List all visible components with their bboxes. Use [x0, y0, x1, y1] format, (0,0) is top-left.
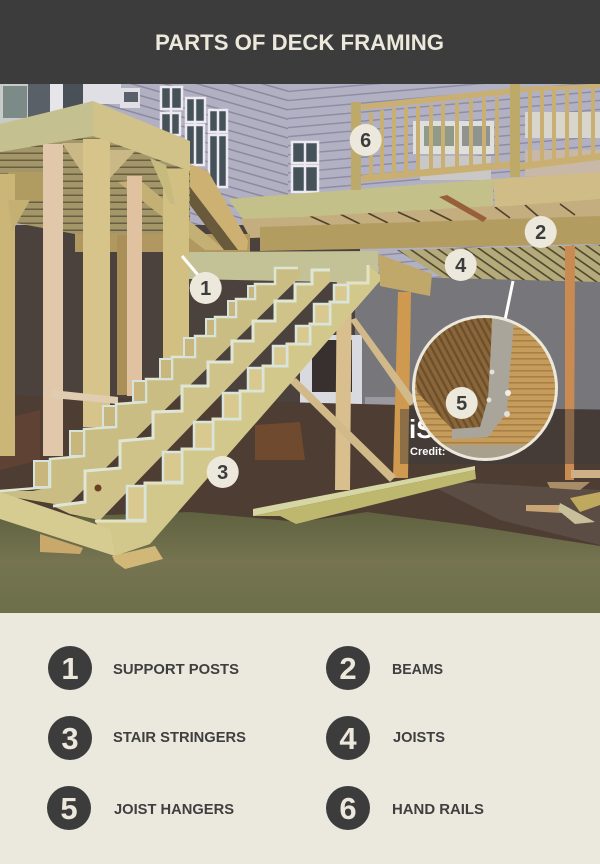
legend item 6	[326, 786, 484, 830]
lumber scraps	[526, 470, 600, 524]
upper rim beam	[228, 172, 600, 222]
badge 2	[525, 216, 557, 248]
watermark band	[400, 409, 600, 464]
house windows left	[161, 87, 318, 192]
title: PARTS OF DECK FRAMING	[155, 30, 444, 55]
stringer: back	[0, 268, 300, 506]
badge 6: 6	[360, 130, 371, 152]
watermark band: iStock	[409, 414, 488, 444]
legend item 3	[48, 716, 246, 760]
legend item 6: HAND RAILS	[392, 801, 484, 818]
badge 1: 1	[200, 278, 211, 300]
lying beam	[253, 466, 476, 524]
badge 3: 3	[217, 462, 228, 484]
cross board	[63, 391, 118, 404]
legend item 2: BEAMS	[392, 661, 443, 678]
stringer: middle	[53, 270, 330, 520]
legend item 6: 6	[339, 791, 357, 826]
legend item 5: JOIST HANGERS	[114, 801, 234, 818]
joists under upper deck	[240, 199, 600, 238]
basement walls	[10, 225, 600, 418]
beam: main girder	[260, 216, 600, 251]
zoom circle: joist hanger	[410, 310, 560, 461]
pointer lines	[182, 256, 513, 320]
watermark band: Credit:	[410, 446, 445, 458]
legend item 1	[48, 646, 239, 690]
dirt ground	[0, 395, 600, 560]
legend item 3: STAIR STRINGERS	[113, 729, 246, 746]
legend item 4: 4	[339, 721, 357, 756]
badge 3	[207, 456, 239, 488]
badge 5: 5	[456, 393, 467, 415]
tower underside and rafters	[0, 136, 250, 252]
badge 2: 2	[535, 222, 546, 244]
badge 5	[446, 387, 478, 419]
badge 6	[350, 124, 382, 156]
grass	[0, 512, 600, 613]
support blocks	[40, 534, 163, 569]
legend item 5: 5	[60, 791, 78, 826]
legend item 2: 2	[339, 651, 357, 686]
windows behind railing	[413, 112, 600, 180]
house siding	[0, 84, 600, 278]
legend item 2	[326, 646, 443, 690]
support posts	[0, 139, 189, 456]
railing	[351, 84, 600, 190]
legend item 1: 1	[61, 651, 79, 686]
legend item 3: 3	[61, 721, 79, 756]
legend item 1: SUPPORT POSTS	[113, 661, 239, 678]
legend item 4	[326, 716, 445, 760]
right posts	[335, 246, 575, 490]
stair stringers	[0, 265, 380, 556]
badge 4: 4	[455, 255, 467, 277]
badge 1	[190, 272, 222, 304]
diagonal braces	[289, 318, 416, 482]
legend panel	[0, 613, 600, 864]
header band	[0, 0, 600, 84]
stringer: front	[95, 265, 380, 556]
badge 4	[445, 249, 477, 281]
top tower beam	[0, 101, 190, 171]
landing beam	[188, 251, 432, 296]
photo: deck under construction	[0, 84, 600, 613]
legend item 4: JOISTS	[393, 729, 445, 746]
lower joists	[397, 245, 600, 282]
rim board	[0, 492, 115, 556]
legend item 5	[47, 786, 234, 830]
